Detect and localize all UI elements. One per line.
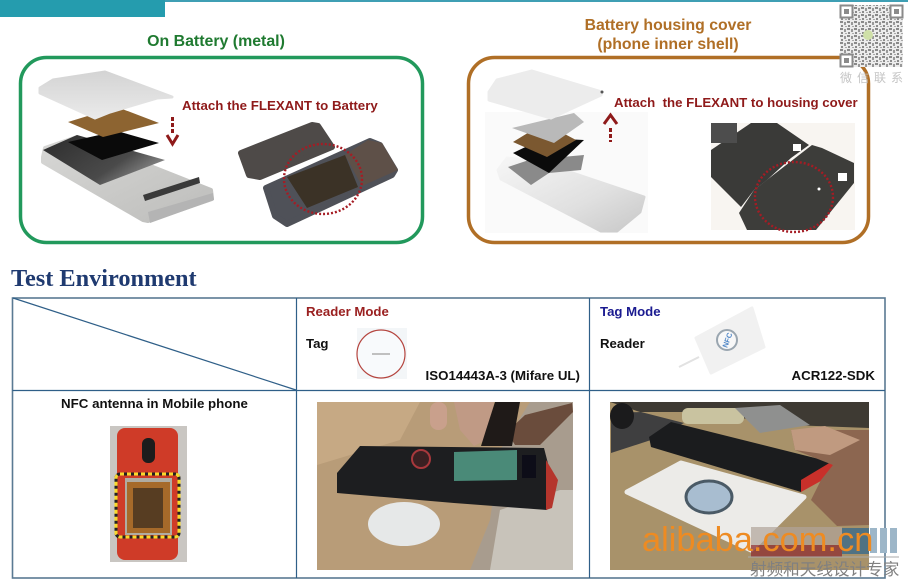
panel: housing cover xyxy=(468,58,868,242)
panel: on battery xyxy=(20,58,422,242)
label: attach to housing: Attach the FLEXANT to housing cover xyxy=(614,95,858,110)
watermark: chinese caption: 射频和天线设计专家 xyxy=(750,560,900,579)
heading: battery housing cover: (phone inner shell) xyxy=(597,36,739,53)
cell: reader mode: Tag xyxy=(306,336,328,351)
illustration: exploded phone with battery antenna xyxy=(40,72,214,223)
arrow: down xyxy=(167,117,178,144)
cell: tag mode xyxy=(600,304,875,383)
icon: NFC tag xyxy=(357,328,407,379)
watermark: logo blocks xyxy=(748,527,899,557)
photo: tag mode test xyxy=(610,402,869,570)
icon: NFC reader xyxy=(679,308,764,373)
table xyxy=(12,298,885,578)
photo: reader mode test xyxy=(317,402,573,570)
cell: NFC antenna in mobile phone: NFC antenna in Mobile phone xyxy=(61,396,248,411)
icon: NFC reader: NFC xyxy=(721,331,735,349)
cell: reader mode: ISO14443A-3 (Mifare UL) xyxy=(426,368,580,383)
heading: battery housing cover: Battery housing cover xyxy=(585,17,751,34)
cell: reader mode: Reader Mode xyxy=(306,304,389,319)
QR caption: 微信联系 xyxy=(840,71,908,85)
illustration: exploded phone with housing antenna xyxy=(485,71,648,233)
photo: red phone antenna xyxy=(110,426,187,562)
cell: NFC antenna in mobile phone xyxy=(61,396,248,562)
cell: tag mode: ACR122-SDK xyxy=(792,368,875,383)
cell: tag mode: Reader xyxy=(600,336,645,351)
heading: test environment: Test Environment xyxy=(11,265,197,292)
photo: battery in phone xyxy=(241,125,398,224)
header bar xyxy=(0,0,908,17)
photo: housing cover xyxy=(711,123,855,232)
arrow: up xyxy=(604,115,617,142)
heading: battery housing cover xyxy=(585,17,751,53)
watermark: alibaba: alibaba.com.cn xyxy=(642,521,873,559)
label: attach to battery: Attach the FLEXANT to Battery xyxy=(182,98,378,113)
cell: reader mode xyxy=(306,304,580,383)
QR code xyxy=(840,5,903,67)
heading: on battery: On Battery (metal) xyxy=(147,33,285,50)
cell: tag mode: Tag Mode xyxy=(600,304,661,319)
